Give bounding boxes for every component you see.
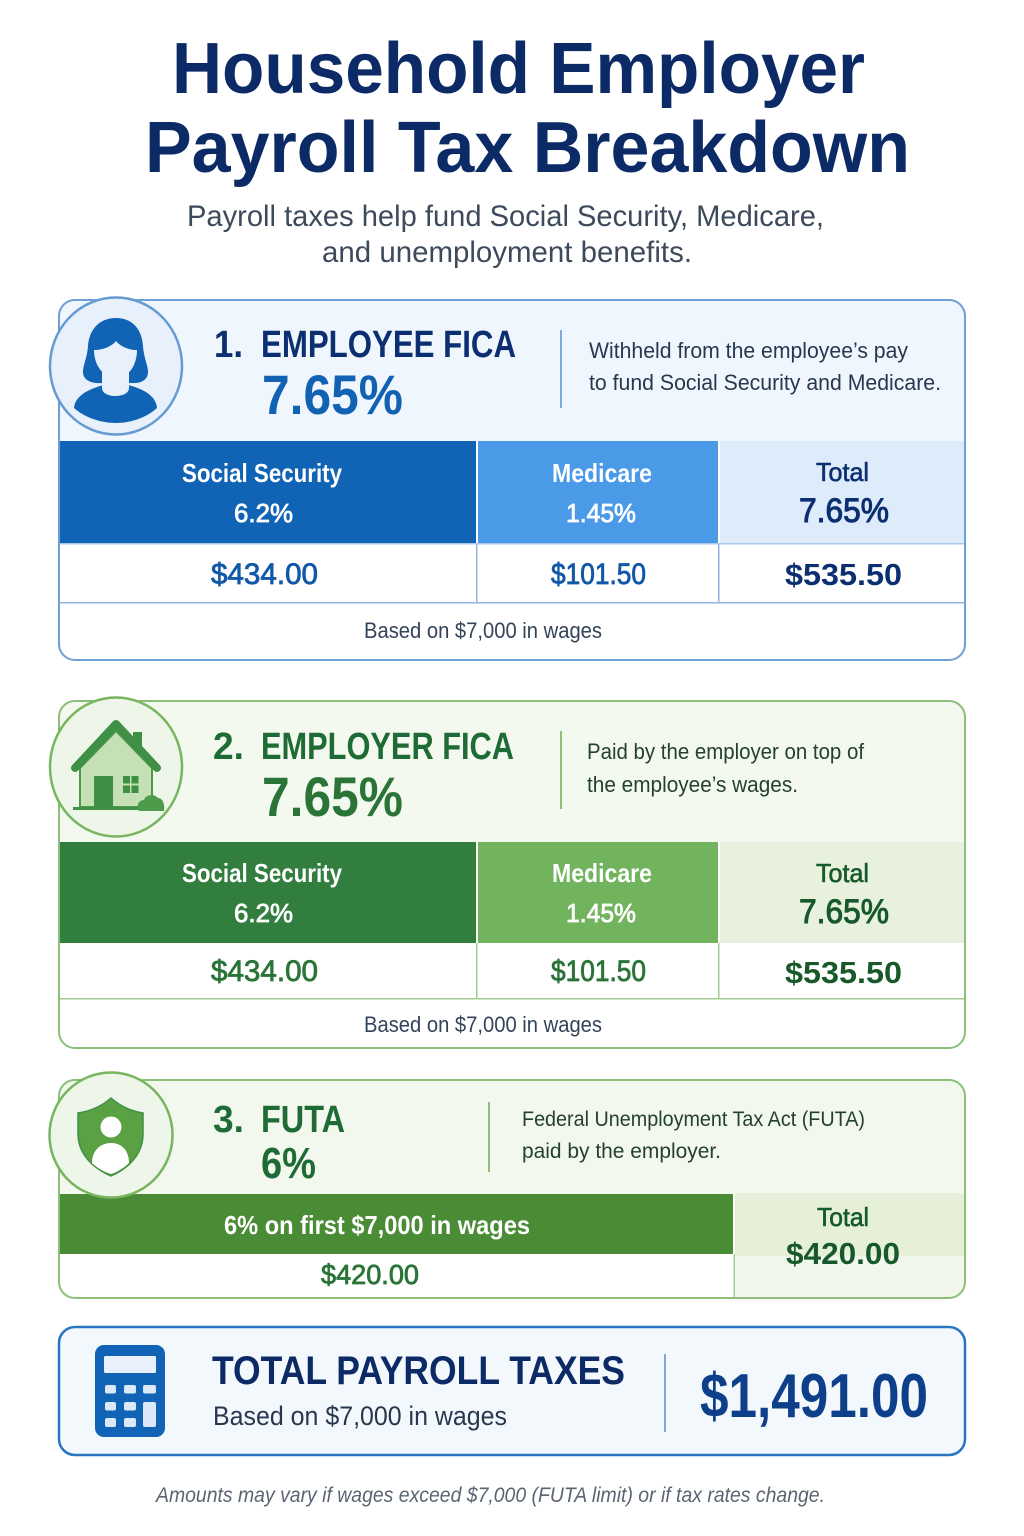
table: FUTA breakdown: $420.00 xyxy=(786,1236,900,1271)
description: the employee’s wages. xyxy=(587,772,798,797)
heading: total payroll taxes: TOTAL PAYROLL TAXES xyxy=(212,1349,625,1393)
icon: shield xyxy=(50,1072,172,1198)
table: FUTA breakdown: 6% on first $7,000 in wages xyxy=(224,1210,530,1240)
description xyxy=(589,338,941,395)
description: Withheld from the employee’s pay xyxy=(589,338,908,363)
table: employee breakdown: $434.00 xyxy=(211,558,318,591)
panel: employee FICA xyxy=(50,298,965,660)
wage basis: Based on $7,000 in wages xyxy=(213,1401,507,1431)
table: employer breakdown: $535.50 xyxy=(785,955,902,990)
panel: total payroll taxes xyxy=(59,1327,965,1455)
table: employer breakdown: $434.00 xyxy=(211,955,318,988)
table: employee breakdown: 7.65% xyxy=(799,492,889,530)
description: Paid by the employer on top of xyxy=(587,739,865,764)
subtitle xyxy=(187,200,824,269)
heading: FUTA: FUTA xyxy=(261,1099,345,1141)
rate: 7.65%: 7.65% xyxy=(262,363,403,426)
heading: FUTA xyxy=(213,1099,345,1141)
heading: employer FICA: EMPLOYER FICA xyxy=(261,726,514,768)
table: employer breakdown: 1.45% xyxy=(566,898,636,928)
table: employee breakdown: Medicare xyxy=(552,458,652,488)
description xyxy=(522,1108,865,1163)
heading: employer FICA: 2. xyxy=(213,726,244,768)
table: employer breakdown: 6.2% xyxy=(234,898,293,928)
panel: employer FICA xyxy=(50,698,965,1048)
title: Payroll Tax Breakdown xyxy=(145,108,910,188)
table: employer breakdown xyxy=(182,858,902,1037)
heading: FUTA: 3. xyxy=(213,1099,244,1141)
table: employee breakdown: $101.50 xyxy=(551,558,646,591)
table: FUTA breakdown: Total xyxy=(817,1202,869,1232)
title xyxy=(145,29,910,188)
table: employee breakdown: Total xyxy=(816,457,869,487)
icon: house xyxy=(50,698,182,836)
title: Household Employer xyxy=(172,29,865,109)
heading: employee FICA: 1. xyxy=(214,324,243,366)
subtitle: Payroll taxes help fund Social Security, Medicare, xyxy=(187,200,824,233)
table: employer breakdown: 7.65% xyxy=(799,893,889,931)
table: employer breakdown: $101.50 xyxy=(551,955,646,988)
table: employee breakdown: 6.2% xyxy=(234,498,293,528)
description: Federal Unemployment Tax Act (FUTA) xyxy=(522,1108,865,1131)
table: FUTA breakdown xyxy=(224,1202,900,1290)
table: employee breakdown: Based on $7,000 in wages xyxy=(364,618,602,643)
total amount: $1,491.00 xyxy=(700,1362,928,1431)
icon: calculator xyxy=(95,1345,165,1437)
description xyxy=(587,739,865,797)
table: employer breakdown: Total xyxy=(816,858,869,888)
subtitle: and unemployment benefits. xyxy=(322,236,692,269)
rate: 7.65%: 7.65% xyxy=(262,765,403,828)
table: FUTA breakdown: $420.00 xyxy=(321,1259,419,1290)
table: employee breakdown xyxy=(182,457,902,643)
table: employer breakdown: Social Security xyxy=(182,858,342,888)
table: employee breakdown: $535.50 xyxy=(785,557,902,592)
table: employer breakdown: Medicare xyxy=(552,858,652,888)
description: to fund Social Security and Medicare. xyxy=(589,370,941,395)
table: employee breakdown: 1.45% xyxy=(566,498,636,528)
table: employee breakdown: Social Security xyxy=(182,458,342,488)
icon: employee xyxy=(50,298,182,434)
rate: 6%: 6% xyxy=(261,1139,316,1188)
panel: FUTA xyxy=(50,1072,965,1298)
table: employer breakdown: Based on $7,000 in wages xyxy=(364,1012,602,1037)
description: paid by the employer. xyxy=(522,1140,721,1163)
heading: employee FICA: EMPLOYEE FICA xyxy=(261,324,516,366)
footnote: Amounts may vary if wages exceed $7,000 (FUTA limit) or if tax rates change. xyxy=(154,1484,825,1507)
